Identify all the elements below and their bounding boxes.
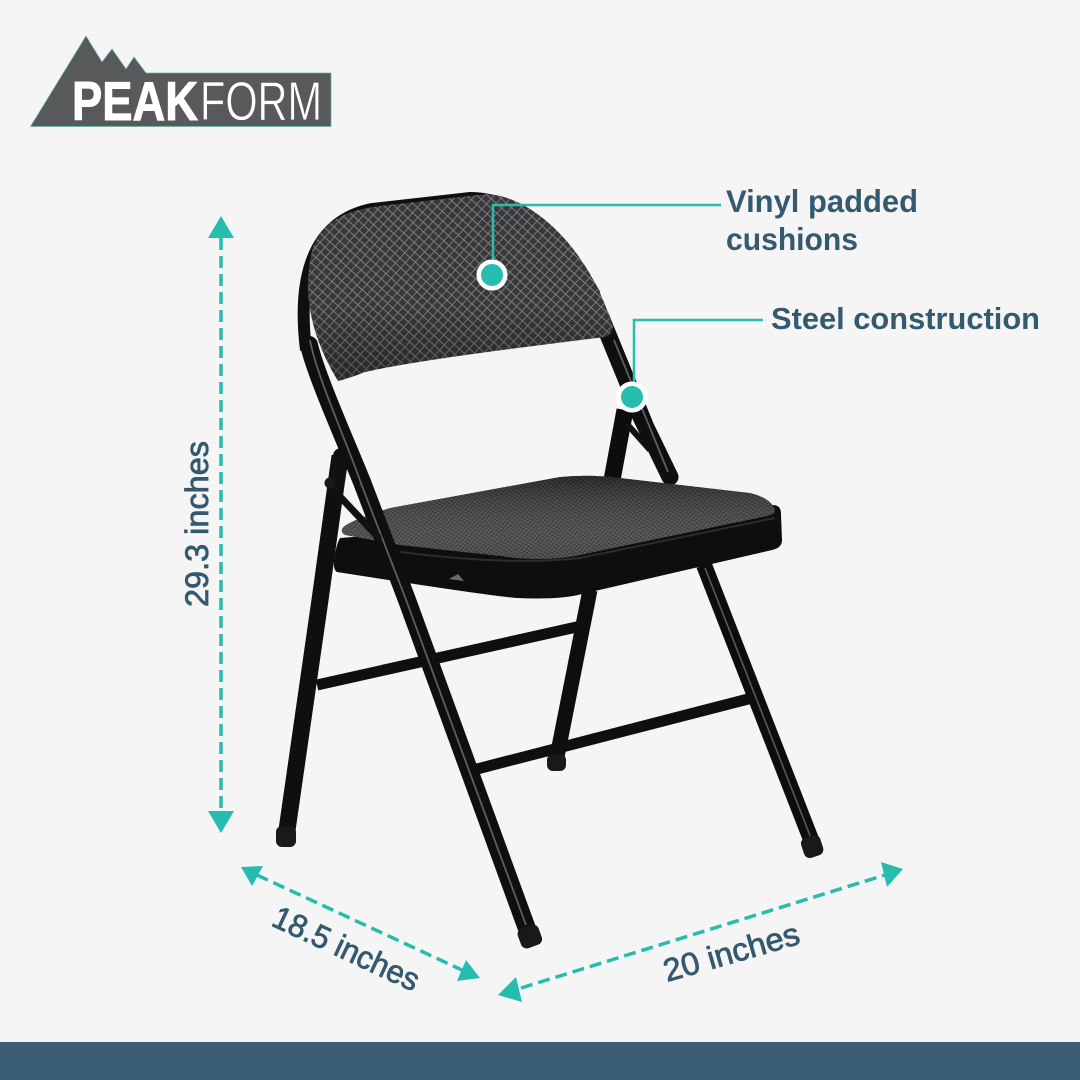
width label: 20 inches (659, 916, 804, 989)
right frame tube (600, 315, 645, 425)
front brace (330, 486, 378, 537)
label text: Vinyl padded (726, 183, 918, 219)
logo mountain shape (30, 36, 331, 126)
frame highlights (310, 340, 668, 925)
seat shading (342, 476, 775, 559)
label text: cushions (726, 221, 858, 257)
chair feet (276, 754, 825, 860)
height label: 29.3 inches (179, 441, 215, 607)
dimension: width (498, 862, 903, 1002)
callout: steel construction (619, 301, 1040, 410)
logo: Peakform (30, 36, 331, 132)
label text: Steel construction (771, 301, 1040, 336)
leader line (634, 320, 763, 384)
bottom band (0, 1042, 1080, 1080)
chair seat highlight (400, 518, 775, 561)
logo wordmark light part: FORM (200, 70, 322, 132)
backrest shading (308, 194, 613, 381)
marker dot (619, 384, 645, 410)
height arrow (208, 216, 234, 833)
front foot (516, 923, 544, 950)
seat scuff (449, 574, 464, 581)
depth arrow (241, 866, 480, 981)
folding chair (276, 194, 825, 950)
backrest cushion (308, 194, 613, 381)
marker dot (479, 262, 505, 288)
chair front leg (309, 345, 530, 937)
dimension: depth (241, 866, 480, 998)
logo wordmark: PEAK (72, 70, 198, 132)
chair seat cushion (342, 476, 775, 559)
chair seat rim (334, 505, 782, 598)
leader line (493, 205, 721, 262)
depth label: 18.5 inches (267, 899, 425, 998)
brace bolt (324, 478, 336, 488)
callout: vinyl padded cushions (479, 183, 918, 288)
chair rear legs (287, 410, 812, 842)
width arrow (498, 862, 903, 1002)
chair leg top joint (300, 336, 318, 354)
chair cross bars (317, 626, 752, 769)
chair backrest frame (304, 198, 595, 350)
dimension: height (179, 216, 234, 833)
